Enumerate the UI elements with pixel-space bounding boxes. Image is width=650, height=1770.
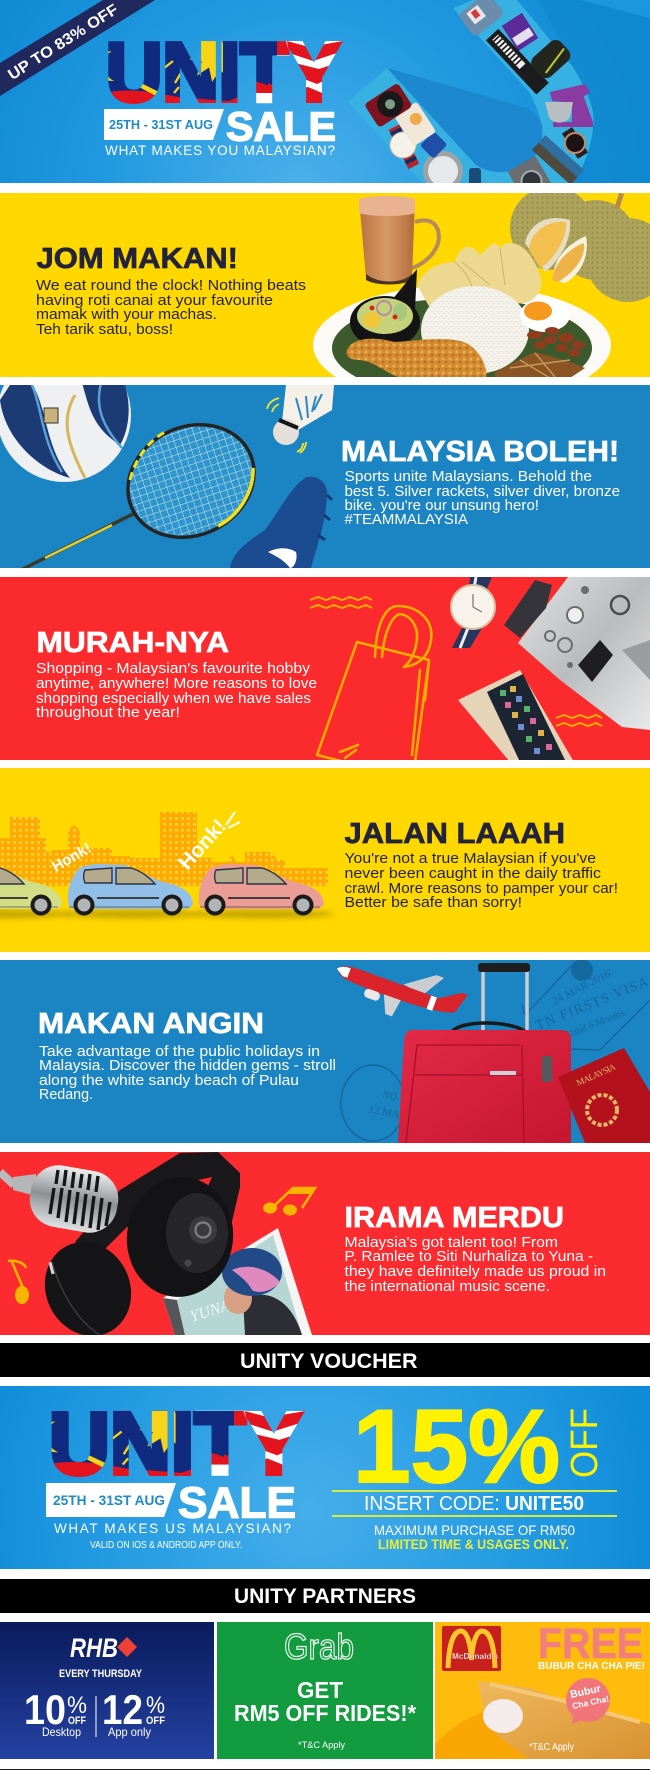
body text: throughout the year! (36, 704, 180, 721)
passport stamps: 12 MAR (367, 1103, 408, 1123)
passport stamps: .24 MAR 2016' (548, 967, 614, 1009)
product U shape (348, 0, 594, 183)
section bar: unity partners (0, 1579, 650, 1613)
offer text: % (146, 1692, 165, 1719)
offer text: App only (108, 1725, 151, 1739)
panel: voucher (0, 1386, 650, 1569)
body text: never been caught in the daily traffic (344, 865, 602, 882)
offer text: OFF (68, 1715, 86, 1727)
panel: hero banner (0, 0, 650, 203)
music notes (8, 1187, 315, 1304)
body text: Redang. (39, 1086, 93, 1103)
ribbon: up to 83% off (0, 0, 155, 96)
badminton racket (21, 423, 256, 568)
product: black bag (531, 40, 570, 78)
logo: unity sale: 25TH - 31ST AUG (109, 117, 213, 132)
heading: JOM MAKAN! (36, 243, 238, 275)
blue car (63, 864, 203, 918)
terms: *T&C Apply (529, 1742, 574, 1753)
panel: makan angin (0, 942, 650, 1143)
heading: MAKAN ANGIN (38, 1008, 264, 1040)
product: round watch (388, 124, 420, 170)
yuna album (163, 1228, 312, 1335)
body text: You're not a true Malaysian if you've (344, 850, 596, 867)
body text: the international music scene. (344, 1278, 550, 1295)
body text: crawl. More reasons to pamper your car! (344, 880, 618, 897)
malaysian passport (558, 1048, 650, 1143)
body text (344, 470, 620, 524)
yuna album: YUNA (188, 1297, 232, 1326)
body text: best 5. Silver rackets, silver diver, bronze (344, 483, 620, 500)
section bar: unity voucher (0, 1343, 650, 1377)
voucher terms (374, 1522, 575, 1552)
passport stamps (341, 959, 650, 1141)
mcdonald's logo: McDonald's (452, 1651, 498, 1661)
product: robot vacuum (423, 151, 463, 183)
body text (36, 277, 306, 338)
body text: bike. you're our unsung hero! (344, 497, 539, 514)
panel: irama merdu (0, 1152, 650, 1350)
product: blue phone (421, 132, 446, 158)
product: detergent (460, 0, 503, 36)
logo: unity sale: UNITY (106, 26, 340, 118)
heading: MURAH-NYA (36, 627, 229, 659)
logo: unity sale: VALID ON IOS & ANDROID APP ONLY. (90, 1540, 242, 1551)
panel: jom makan (0, 193, 650, 377)
body text: Take advantage of the public holidays in (39, 1043, 320, 1060)
body text: shopping especially when we have sales (36, 690, 311, 707)
offer text: EVERY THURSDAY (59, 1668, 143, 1680)
football (0, 385, 131, 482)
panel: jalan laaah (0, 768, 650, 952)
peanuts (527, 327, 585, 357)
product: tablet (532, 135, 584, 185)
headphones (30, 1152, 241, 1350)
product: wrist watch (562, 127, 588, 159)
body text: mamak with your machas. (36, 306, 217, 323)
body text: P. Ramlee to Siti Nurhaliza to Yuna - (344, 1248, 593, 1265)
body text (344, 1234, 606, 1295)
free heading: FREE (538, 1620, 643, 1668)
heading: JALAN LAAAH (344, 818, 565, 850)
honk labels (49, 812, 240, 876)
green car (0, 864, 72, 918)
body text: Malaysia. Discover the hidden gems - stroll (39, 1057, 336, 1074)
passport stamps: NO. (381, 1089, 400, 1103)
plate (313, 288, 611, 377)
logo: unity sale: 25TH - 31ST AUG (53, 1492, 165, 1508)
rhb logo: RHB (70, 1633, 118, 1663)
microphone (0, 1161, 123, 1237)
voucher terms: LIMITED TIME & USAGES ONLY. (378, 1536, 569, 1552)
durians (510, 186, 650, 302)
terms: *T&C Apply (298, 1740, 345, 1751)
body text: #TEAMMALAYSIA (344, 511, 468, 528)
logo: unity sale: WHAT MAKES US MALAYSIAN? (54, 1521, 291, 1536)
malaysian passport: MALAYSIA (575, 1061, 618, 1088)
body text: Teh tarik satu, boss! (36, 321, 173, 338)
product: keyboard (486, 29, 549, 95)
ribbon: up to 83% off: UP TO 83% OFF (5, 1, 121, 84)
body text (39, 1043, 336, 1103)
passport stamps: Valid 6 Months (565, 1007, 626, 1041)
body text: Malaysia's got talent too! From (344, 1234, 558, 1251)
offer text: GET (297, 1677, 343, 1703)
offer text: OFF (146, 1715, 165, 1727)
offer text: 12 (102, 1686, 143, 1733)
fried chicken (347, 339, 486, 378)
section bar: unity partners: UNITY PARTNERS (234, 1585, 416, 1608)
bubur cha cha pie (478, 1681, 650, 1760)
body text: along the white sandy beach of Pulau (39, 1072, 299, 1089)
honk labels: Honk! (174, 815, 231, 874)
body text: Shopping - Malaysian's favourite hobby (36, 660, 311, 677)
offer text: 10 (24, 1686, 66, 1733)
logo: unity sale (46, 1396, 302, 1551)
product: washing machine (508, 156, 551, 183)
product: iphone (394, 102, 436, 147)
voucher terms: MAXIMUM PURCHASE OF RM50 (374, 1522, 575, 1538)
offer text (24, 1668, 165, 1739)
body text: Sports unite Malaysians. Behold the (344, 468, 592, 485)
panel: mcdonald's partner (435, 1620, 650, 1760)
mcdonald's logo (442, 1626, 501, 1671)
heading: MALAYSIA BOLEH! (341, 436, 619, 468)
red suitcase (398, 963, 571, 1143)
offer text: RM5 OFF RIDES!* (234, 1700, 416, 1726)
acar bowl (350, 269, 420, 348)
logo: unity sale (104, 41, 343, 155)
free heading: BUBUR CHA CHA PIE! (538, 1661, 645, 1672)
traffic cars (0, 864, 334, 918)
speech bubble: Cha Cha! (571, 1693, 610, 1711)
panel: murah-nya (0, 577, 650, 762)
body text: Better be safe than sorry! (344, 894, 522, 911)
grab logo: Grab (284, 1626, 354, 1667)
product: red camera (366, 84, 412, 126)
promo code: INSERT CODE: UNITE50 (364, 1493, 584, 1515)
discount 15% off: OFF (564, 1408, 606, 1478)
body text: they have definitely made us proud in (344, 1263, 606, 1280)
passport stamps: TN FIRSTS VISA (534, 975, 650, 1034)
shopping bag doodle (317, 606, 431, 762)
teh tarik mug (359, 196, 439, 284)
section bar: unity voucher: UNITY VOUCHER (240, 1350, 418, 1373)
speech bubble (566, 1678, 610, 1724)
body text: We eat round the clock! Nothing beats (36, 277, 306, 294)
logo: unity sale: WHAT MAKES YOU MALAYSIAN? (105, 143, 335, 158)
speech bubble: Bubur (569, 1683, 602, 1701)
wrist watch (451, 577, 495, 648)
body text: anytime, anywhere! More reasons to love (36, 675, 317, 692)
product: stand mixer (545, 84, 593, 127)
boiled egg (520, 298, 570, 332)
offer text: Desktop (42, 1725, 81, 1739)
rice (421, 286, 529, 374)
heading: IRAMA MERDU (344, 1202, 564, 1234)
body text (344, 850, 618, 911)
logo: unity sale: UNITY (49, 1396, 302, 1492)
anchovies (495, 352, 585, 378)
discount 15% off: 15% (353, 1389, 560, 1505)
offer text: % (67, 1692, 87, 1719)
offer text (234, 1677, 416, 1726)
body text: having roti canai at your favourite (36, 292, 273, 309)
food illustration (313, 193, 650, 377)
iphone (458, 670, 574, 762)
panel: grab partner (217, 1622, 433, 1759)
panel: malaysia boleh (0, 385, 650, 568)
football boot (230, 477, 332, 568)
espresso machine (504, 577, 650, 730)
body text (36, 660, 317, 721)
city skyline (0, 812, 328, 886)
airasia plane (328, 942, 470, 1038)
product: drill (469, 168, 481, 183)
panel: rhb partner (0, 1622, 214, 1759)
shuttlecock (267, 385, 334, 453)
squiggles (310, 597, 602, 726)
product: purple box (502, 13, 538, 51)
logo: unity sale: SALE (178, 1478, 296, 1528)
logo: unity sale: SALE (226, 104, 336, 150)
pink car (194, 864, 334, 918)
keropok crackers (417, 243, 541, 308)
honk labels: Honk! (49, 840, 94, 876)
